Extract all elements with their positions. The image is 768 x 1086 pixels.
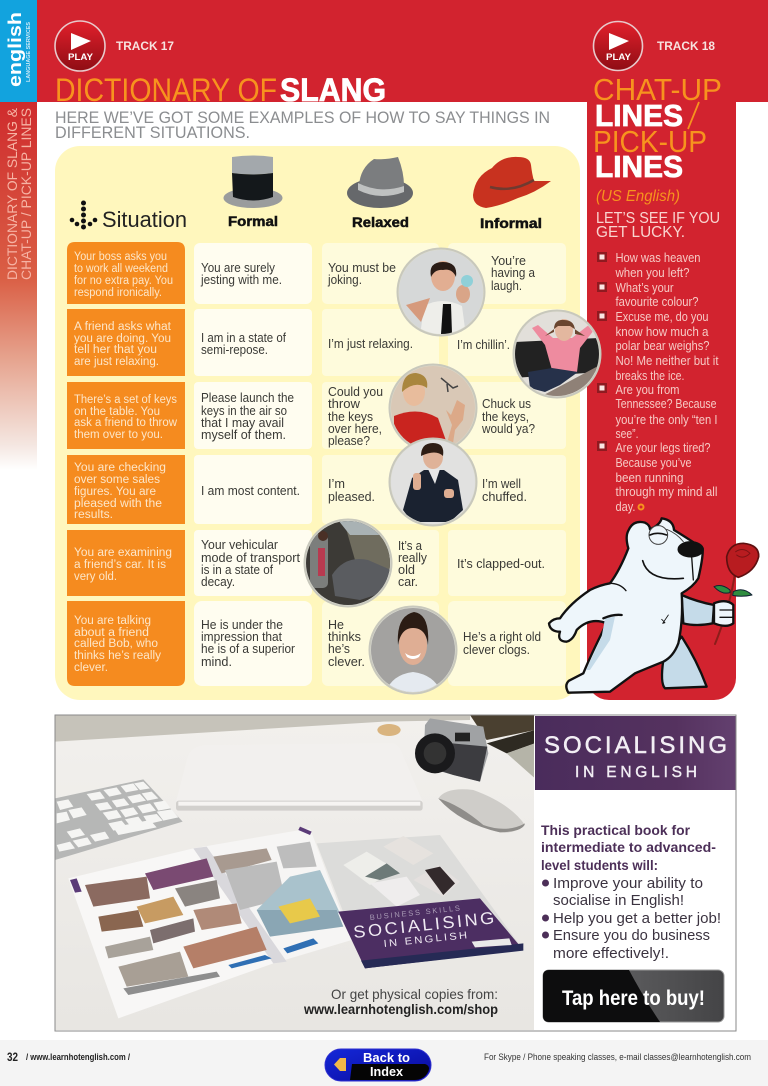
physical copies text: Or get physical copies from:	[331, 986, 498, 1002]
row 2 situation text: are just relaxing.	[74, 356, 159, 368]
illustration: polar bear with rose	[549, 518, 759, 693]
title: dictionary of slang: SLANG	[280, 72, 386, 108]
formal column text: Your vehicular	[201, 538, 278, 552]
row 1 situation text: Your boss asks you	[74, 251, 167, 263]
book cover	[317, 835, 523, 968]
numbered list: favourite colour?	[616, 295, 699, 309]
left sidebar: logo and section title: DICTIONARY OF SLANG &	[4, 107, 20, 280]
panel: chat-up lines	[587, 22, 736, 700]
row 6 situation text: clever.	[74, 662, 108, 674]
photo 3: man throwing keys	[390, 364, 476, 452]
book title banner: IN ENGLISH	[575, 764, 697, 781]
photo 4: man in suit pointing	[390, 438, 476, 526]
icon: informal cowboy hat	[473, 157, 551, 208]
row 4 situation text: figures. You are	[74, 486, 156, 498]
numbered list: polar bear weighs?	[616, 339, 710, 353]
title: chat-up lines pick-up lines: CHAT-UP	[593, 72, 722, 107]
intro: let's see if you get lucky: GET LUCKY.	[596, 224, 685, 241]
informal column text	[457, 254, 545, 657]
row 1 situation text: to work all weekend	[74, 263, 168, 275]
icon: formal top hat	[224, 156, 282, 208]
relaxed column text: You must be	[328, 261, 396, 275]
relaxed column text: Could you	[328, 385, 383, 399]
row 5 situation text: You are examining	[74, 547, 172, 559]
numbered list: day.	[616, 500, 636, 514]
advert frame	[55, 715, 736, 1031]
informal column text: He’s a right old	[463, 630, 541, 644]
relaxed column text: He	[328, 618, 344, 632]
informal column text: You’re	[491, 254, 526, 268]
informal column text: clever clogs.	[463, 643, 530, 657]
row 6 situation text: about a friend	[74, 627, 149, 639]
track 17 label: TRACK 17	[116, 39, 174, 53]
title: chat-up lines pick-up lines	[593, 72, 722, 184]
row 2 situation text: tell her that you	[74, 344, 157, 356]
photo 5: old car	[304, 520, 392, 606]
book description: This practical book for	[541, 822, 691, 838]
row 1 situation text	[74, 251, 173, 299]
numbered list: when you left?	[615, 266, 690, 280]
formal and casual cell backgrounds	[194, 243, 566, 686]
formal column text: keys in the air so	[201, 404, 287, 418]
relaxed column text: throw	[328, 397, 361, 411]
title: dictionary of slang: DICTIONARY OF	[55, 72, 277, 108]
numbered list: through my mind all	[616, 485, 718, 499]
icon: play button track 18: PLAY	[606, 52, 632, 63]
numbered list	[597, 251, 719, 514]
informal column text: I’m chillin’.	[457, 338, 510, 352]
background wall	[55, 715, 470, 742]
left sidebar: logo and section title: english	[5, 12, 25, 87]
row 5 situation text: very old.	[74, 571, 117, 583]
intro: let's see if you get lucky: LET’S SEE IF YOU	[596, 210, 720, 227]
formal column text: mode of transport	[201, 551, 301, 565]
dark corner	[470, 715, 535, 778]
numbered list: see”.	[616, 427, 638, 441]
row 1 situation text: respond ironically.	[74, 287, 162, 299]
row 3 situation text: ask a friend to throw	[74, 417, 178, 429]
relaxed column text: car.	[398, 575, 418, 589]
relaxed column text: I’m just relaxing.	[328, 337, 413, 351]
footer	[0, 1040, 768, 1086]
title: chat-up lines pick-up lines: LINES	[595, 98, 683, 133]
book title banner: SOCIALISING	[544, 732, 727, 759]
intro text: DIFFERENT SITUATIONS.	[55, 123, 250, 142]
row 5 situation text	[74, 547, 172, 583]
benefits list	[542, 875, 721, 962]
rose	[714, 543, 759, 644]
physical copies text	[304, 989, 498, 1017]
relaxed column text: clever.	[328, 655, 365, 669]
informal column text: having a	[491, 266, 535, 280]
numbered list: How was heaven	[616, 251, 701, 265]
mouse	[438, 789, 525, 833]
icon: relaxed fedora	[347, 157, 413, 208]
heading: situation: Situation	[102, 207, 187, 232]
row 2 situation text	[74, 321, 172, 368]
benefits list: Help you get a better job!	[553, 910, 721, 927]
informal column text: chuffed.	[482, 490, 527, 504]
cover text: IN ENGLISH	[383, 930, 470, 950]
book description: level students will:	[541, 857, 658, 873]
row 4 situation text: pleased with the	[74, 498, 162, 510]
row 4 situation text	[74, 462, 166, 521]
relaxed column text: thinks	[328, 630, 361, 644]
informal column text: Chuck us	[482, 397, 531, 411]
cover text: SOCIALISING	[352, 908, 498, 942]
relaxed column text: please?	[328, 434, 370, 448]
row 6 situation text: called Bob, who	[74, 638, 158, 650]
numbered list: Are your legs tired?	[616, 441, 711, 455]
row 1 situation text: for no extra pay. You	[74, 275, 173, 287]
left sidebar: logo and section title: LANGUAGE SERVICES	[26, 21, 32, 82]
numbered list: know how much a	[616, 325, 709, 339]
relaxed column text: really	[398, 551, 428, 565]
formal column text: He is under the	[201, 618, 283, 632]
numbered list: breaks the ice.	[616, 369, 684, 383]
advert: info panel	[534, 715, 736, 1031]
row 4 situation text: You are checking	[74, 462, 166, 474]
numbered list: What’s your	[616, 281, 674, 295]
row 6 situation text	[74, 615, 161, 674]
relaxed column text: over here,	[328, 422, 382, 436]
row 3 situation text: them over to you.	[74, 429, 163, 441]
track 18 label: TRACK 18	[657, 39, 715, 53]
button: tap here to buy	[543, 970, 724, 1022]
relaxed column text: the keys	[328, 410, 373, 424]
formal column text: is in a state of	[201, 563, 273, 577]
title: chat-up lines pick-up lines: PICK-UP	[593, 124, 707, 159]
formal column text: that I may avail	[201, 416, 284, 430]
row 2 situation text: A friend asks what	[74, 321, 172, 333]
benefits list: socialise in English!	[553, 892, 684, 909]
row 2 situation text: you are doing. You	[74, 333, 171, 345]
heading: relaxed: Relaxed	[352, 214, 409, 230]
formal column text: mind.	[201, 655, 232, 669]
photo 2: relaxing woman	[514, 310, 600, 398]
relaxed column text: It’s a	[398, 539, 422, 553]
formal column text: jesting with me.	[200, 273, 282, 287]
numbered list: been running	[616, 471, 684, 485]
formal column text: he is of a superior	[201, 642, 295, 656]
intro: let's see if you get lucky	[596, 210, 720, 241]
informal column text: the keys,	[482, 410, 529, 424]
cover text: BUSINESS SKILLS	[369, 903, 462, 922]
formal column text: myself of them.	[201, 428, 286, 442]
wooden figure	[377, 724, 401, 736]
numbered list: Because you’ve	[616, 456, 692, 470]
relaxed column text: pleased.	[328, 490, 375, 504]
physical copies text: www.learnhotenglish.com/shop	[303, 1002, 498, 1017]
heading: informal: Informal	[480, 215, 542, 231]
button: tap here to buy: Tap here to buy!	[562, 987, 705, 1010]
row 4 situation text: results.	[74, 509, 113, 521]
formal column text: semi-repose.	[201, 343, 268, 357]
page number: 32	[7, 1050, 18, 1064]
magazine pages	[68, 827, 352, 1018]
book title banner	[535, 716, 736, 790]
numbered list: you’re the only “ten I	[616, 413, 718, 427]
icon: play button track 18	[594, 22, 642, 70]
camera	[415, 718, 488, 782]
numbered list: Excuse me, do you	[616, 310, 709, 324]
formal column text: I am most content.	[201, 484, 300, 498]
website: / www.learnhotenglish.com /	[26, 1052, 130, 1062]
informal column text: would ya?	[481, 422, 535, 436]
row 3 situation text: on the table. You	[74, 406, 160, 418]
formal column text: You are surely	[201, 261, 276, 275]
advert: photo of book on desk	[55, 715, 535, 1030]
relaxed column text: I’m	[328, 477, 345, 491]
photo 1: man with light bulb	[398, 248, 484, 336]
benefits list: Improve your ability to	[553, 875, 703, 892]
book description: intermediate to advanced-	[541, 839, 716, 855]
keyboard	[55, 779, 183, 860]
laptop	[176, 800, 423, 810]
photo 6: smiling man	[370, 606, 456, 695]
row 5 situation text: a friend’s car. It is	[74, 559, 166, 571]
subtitle: us english: (US English)	[596, 188, 680, 205]
informal column text: I’m well	[482, 477, 521, 491]
formal column text: decay.	[201, 575, 235, 589]
situation cells	[67, 242, 185, 686]
heading: formal: Formal	[228, 213, 278, 229]
intro text: HERE WE’VE GOT SOME EXAMPLES OF HOW TO SAY THINGS IN	[55, 108, 550, 127]
numbered list: No! Me neither but it	[616, 354, 719, 368]
icon: play button track 17: PLAY	[68, 52, 94, 63]
numbered list: Are you from	[616, 383, 680, 397]
row 6 situation text: You are talking	[74, 615, 151, 627]
relaxed column text: old	[398, 563, 415, 577]
row 3 situation text: There’s a set of keys	[74, 394, 177, 406]
row 6 situation text: thinks he’s really	[74, 650, 161, 662]
button: back to index: Index	[370, 1065, 403, 1079]
title: chat-up lines pick-up lines: LINES	[595, 149, 683, 184]
row 3 situation text	[74, 394, 178, 441]
icon: play button track 17	[55, 21, 105, 71]
formal column text: impression that	[201, 630, 282, 644]
formal column text	[200, 261, 301, 669]
informal column text: laugh.	[491, 279, 522, 293]
red header band	[37, 0, 768, 102]
left sidebar: logo and section title: CHAT-UP / PICK-UP LINES	[18, 108, 34, 280]
left sidebar: logo and section title	[0, 0, 37, 470]
row 4 situation text: over some sales	[74, 474, 160, 486]
book description	[541, 822, 716, 873]
benefits list: Ensure you do business	[553, 927, 710, 944]
benefits list: more effectively!.	[553, 945, 669, 962]
relaxed column text: he’s	[328, 642, 350, 656]
button: back to index: Back to	[363, 1051, 410, 1065]
numbered list: Tennessee? Because	[616, 397, 717, 411]
formal column text: Please launch the	[201, 391, 294, 405]
button: back to index	[325, 1049, 431, 1081]
formal column text: I am in a state of	[201, 331, 286, 345]
intro text	[55, 108, 550, 142]
relaxed column text	[327, 261, 428, 669]
relaxed column text: joking.	[327, 273, 362, 287]
panel: slang table	[55, 146, 580, 700]
icon: situation arrow of dots	[70, 200, 97, 230]
informal column text: It’s clapped-out.	[457, 557, 545, 571]
